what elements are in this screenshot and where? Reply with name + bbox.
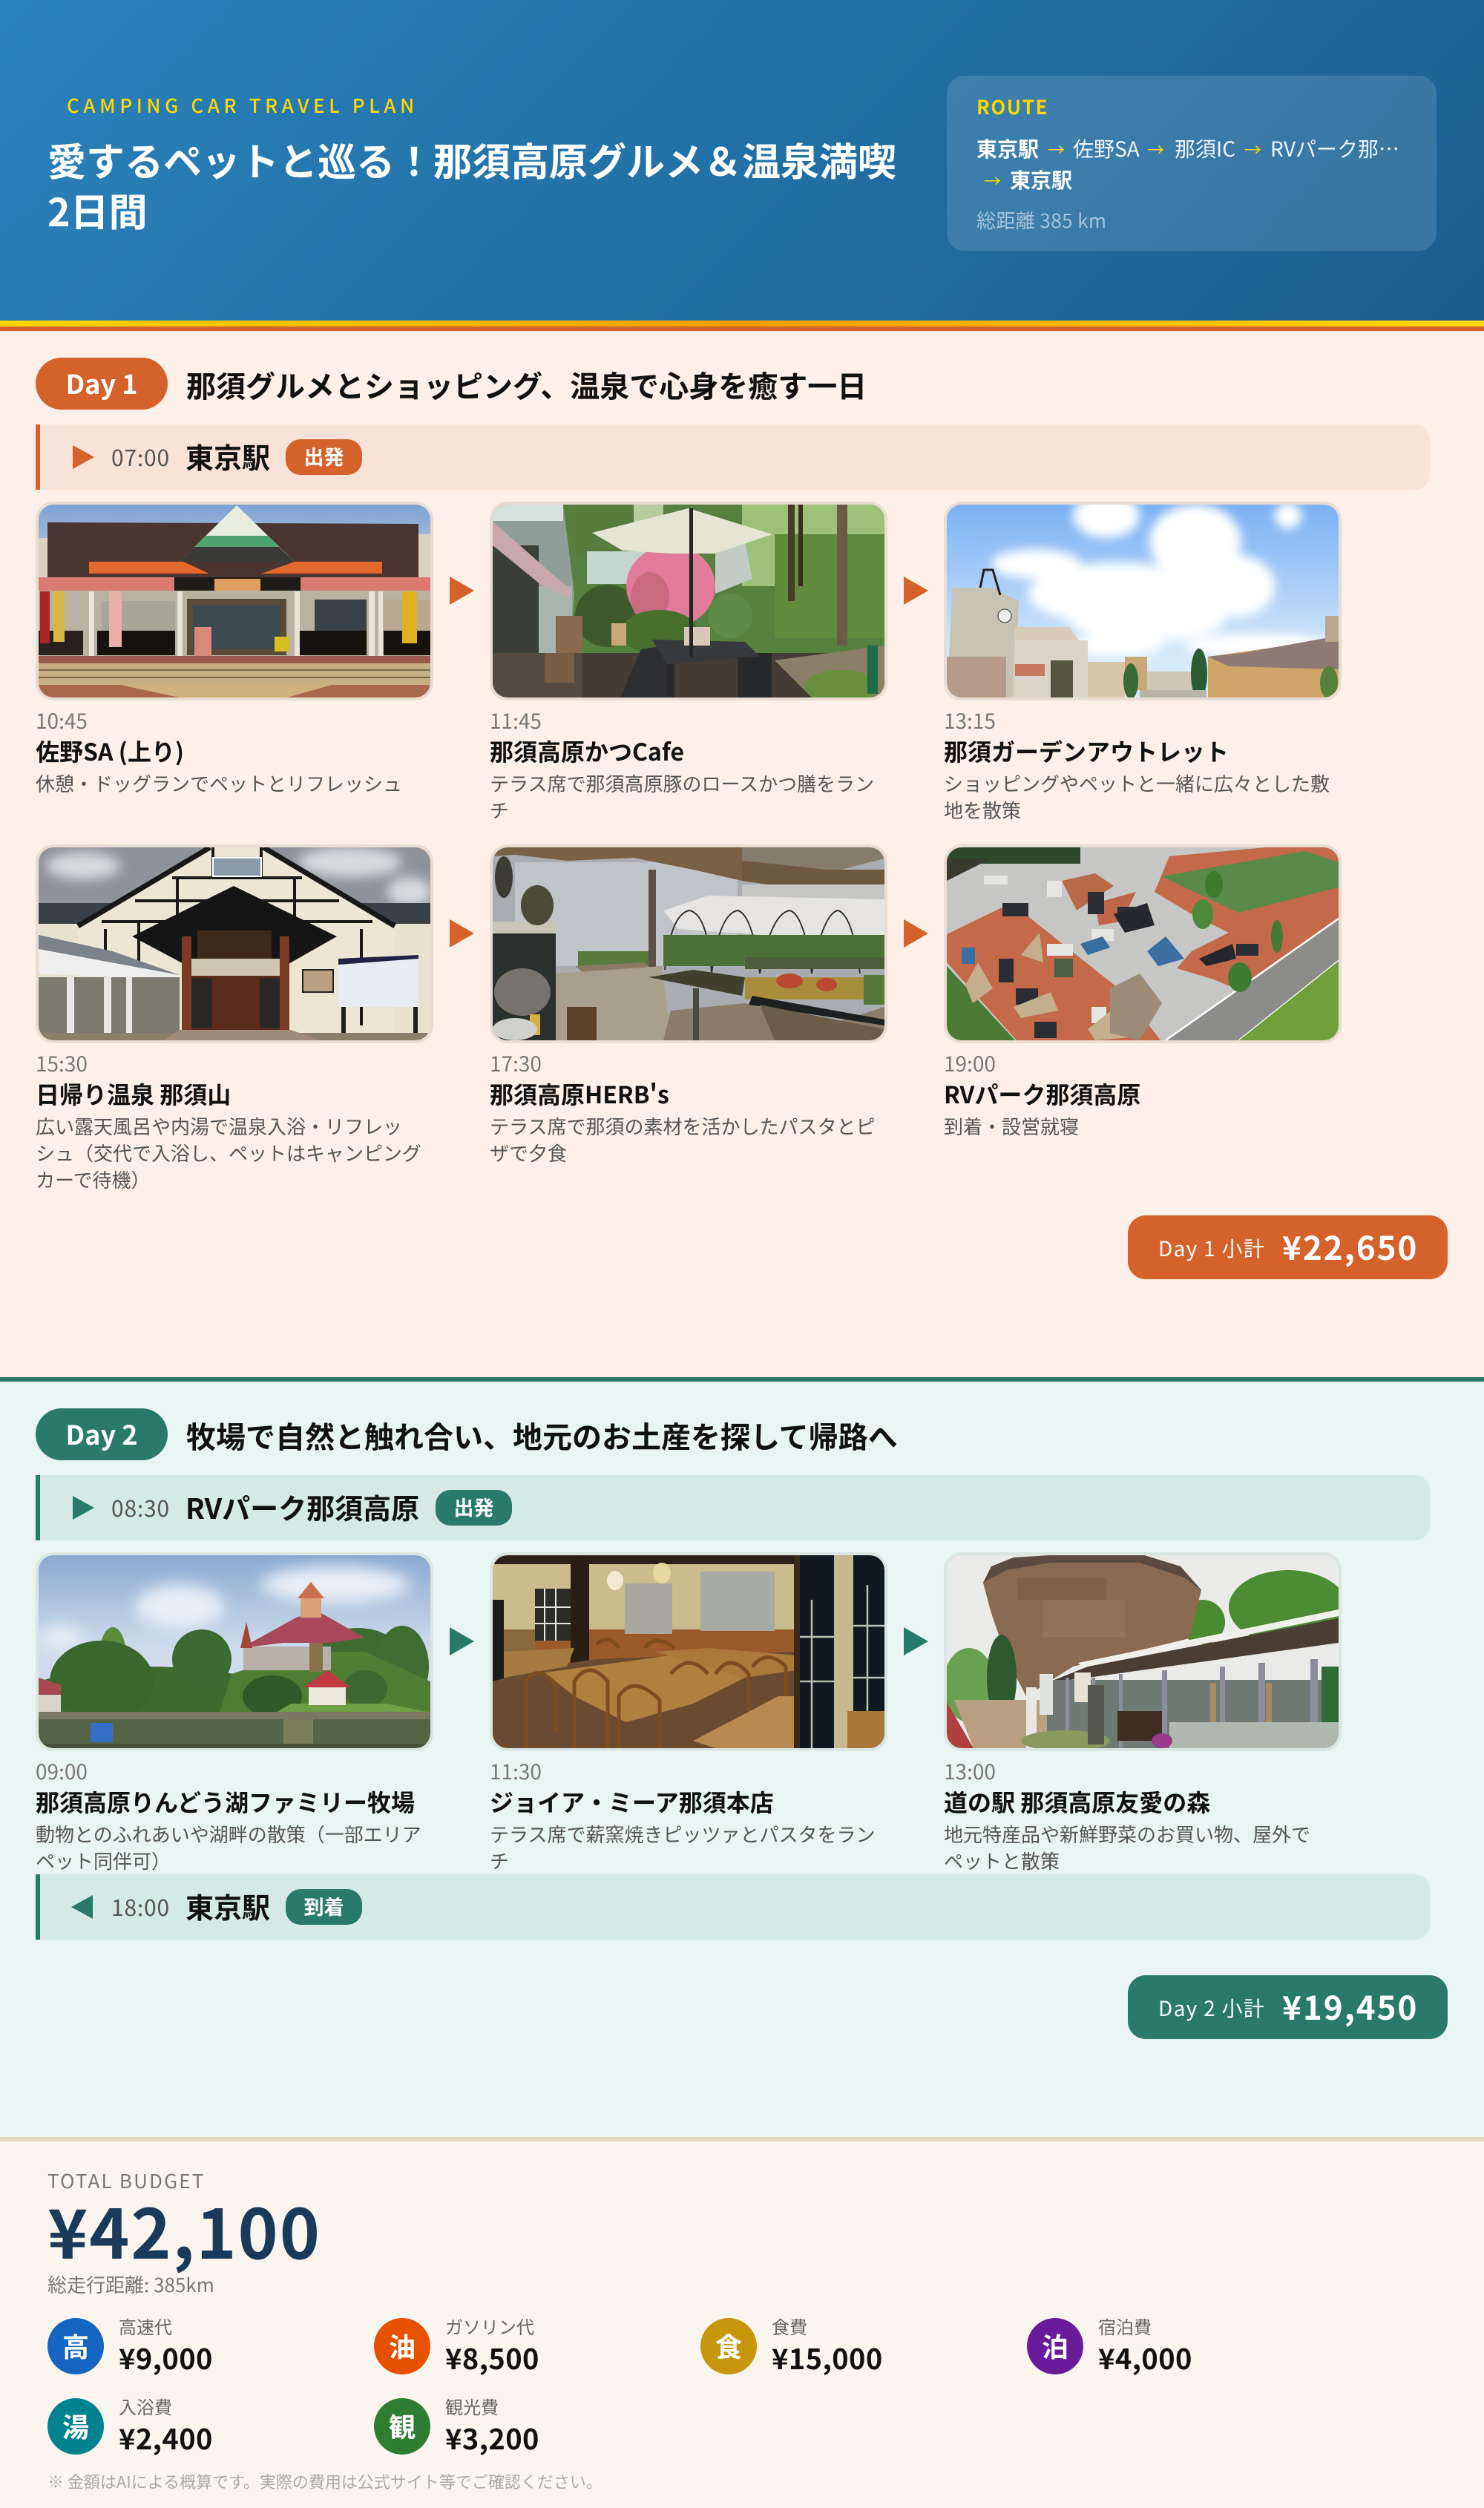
arrow — [450, 577, 474, 605]
day 2 subtotal — [1128, 1975, 1448, 2039]
day 1 heading: 那須グルメとショッピング、温泉で心身を癒す一日 — [186, 363, 867, 406]
description — [944, 1820, 1310, 1874]
photo: lakeside farm — [36, 1552, 433, 1751]
label: 高速代 — [119, 2313, 172, 2339]
departure place: RVパーク那須高原 — [186, 1486, 419, 1527]
stop: Sano SA — [36, 502, 433, 797]
name: 那須高原かつCafe — [490, 734, 684, 768]
stop: garden outlet — [944, 502, 1342, 824]
description: チ — [490, 796, 509, 824]
description — [944, 769, 1330, 824]
route heading: ROUTE — [976, 93, 1048, 120]
day 2 badge: Day 2 — [65, 1414, 138, 1453]
icon: lodging — [1027, 2318, 1083, 2374]
description: 到着・設営就寝 — [944, 1112, 1079, 1140]
stop: katsu cafe — [490, 502, 887, 824]
photo: RV park aerial — [944, 844, 1342, 1043]
icon: highway: 高 — [62, 2326, 89, 2365]
panel: day 2 — [0, 1377, 1484, 2137]
icon: highway — [47, 2318, 104, 2374]
label: 宿泊費 — [1098, 2313, 1152, 2339]
day 1 badge: Day 1 — [65, 364, 138, 402]
title: 愛するペットと巡る！那須高原グルメ＆温泉満喫 — [47, 131, 896, 187]
icon: sightseeing: 観 — [389, 2406, 416, 2445]
description: カーで待機） — [36, 1166, 150, 1193]
route stops: 東京駅 — [976, 134, 1039, 163]
name: 那須高原りんどう湖ファミリー牧場 — [36, 1785, 415, 1819]
icon: sightseeing — [374, 2398, 430, 2455]
description: 地を散策 — [944, 796, 1021, 824]
departure bar — [36, 424, 1430, 490]
route stops: → — [1244, 136, 1261, 161]
stop: RV park — [944, 844, 1342, 1140]
label: 観光費 — [445, 2393, 499, 2419]
stop: michi no eki — [944, 1552, 1342, 1874]
value: ¥15,000 — [772, 2337, 883, 2377]
subtotal label: Day 1 小計 — [1158, 1233, 1265, 1263]
name: 道の駅 那須高原友愛の森 — [944, 1785, 1210, 1819]
value: ¥8,500 — [445, 2337, 539, 2377]
description: シュ（交代で入浴し、ペットはキャンピング — [36, 1139, 421, 1166]
description: 広い露天風呂や内湯で温泉入浴・リフレッ — [36, 1112, 402, 1140]
name: 那須ガーデンアウトレット — [944, 734, 1229, 768]
budget label: TOTAL BUDGET — [47, 2167, 206, 2194]
name: RVパーク那須高原 — [944, 1077, 1140, 1111]
description — [490, 1112, 875, 1166]
stop: herbs — [490, 844, 887, 1166]
stop: family farm — [36, 1552, 433, 1874]
departure tag: 出発 — [304, 441, 344, 470]
description — [490, 1820, 875, 1874]
stop: onsen — [36, 844, 433, 1193]
photo: terrace cafe — [490, 502, 887, 700]
departure tag — [286, 439, 362, 475]
name: ジョイア・ミーア那須本店 — [490, 1785, 774, 1819]
icon: departure triangle — [73, 445, 94, 469]
photo: wooden tower — [944, 1552, 1342, 1751]
cost: food — [700, 2313, 883, 2377]
route stops — [976, 134, 1399, 194]
description: テラス席で那須の素材を活かしたパスタとピ — [490, 1112, 875, 1140]
label: 入浴費 — [119, 2393, 172, 2419]
label: ガソリン代 — [445, 2313, 534, 2339]
photo: Sano service area — [36, 502, 433, 700]
route stops: 東京駅 — [1010, 165, 1072, 194]
value: ¥4,000 — [1098, 2337, 1192, 2377]
icon: food — [700, 2318, 757, 2374]
photo: restaurant interior — [490, 1552, 887, 1751]
title — [47, 131, 896, 237]
photo: greenhouse — [490, 844, 887, 1043]
day 2 badge — [36, 1408, 168, 1460]
header panel — [0, 0, 1484, 326]
cost: sightseeing — [374, 2393, 539, 2458]
description — [490, 769, 874, 824]
description: テラス席で那須高原豚のロースかつ膳をラン — [490, 769, 874, 797]
arrival place: 東京駅 — [186, 1885, 270, 1926]
name: 那須高原HERB's — [490, 1077, 669, 1111]
arrival tag — [286, 1889, 362, 1925]
description: 動物とのふれあいや湖畔の散策（一部エリア — [36, 1820, 421, 1848]
total distance: 総距離 385 km — [976, 206, 1106, 234]
budget total: ¥42,100 — [47, 2180, 321, 2279]
description: チ — [490, 1847, 509, 1874]
time: 19:00 — [944, 1048, 996, 1078]
stop: Gioia Mia — [490, 1552, 887, 1874]
time: 17:30 — [490, 1048, 542, 1078]
route panel — [947, 76, 1437, 251]
icon: departure triangle — [73, 1496, 94, 1520]
description: 休憩・ドッグランでペットとリフレッシュ — [36, 769, 402, 797]
photo: outlet — [944, 502, 1342, 700]
description — [36, 1112, 421, 1193]
value: ¥2,400 — [119, 2417, 213, 2458]
arrow — [450, 1627, 474, 1655]
description: ショッピングやペットと一緒に広々とした敷 — [944, 769, 1330, 797]
icon: fuel — [374, 2318, 430, 2374]
time: 15:30 — [36, 1048, 88, 1078]
description: ペットと散策 — [944, 1847, 1060, 1874]
name: 佐野SA (上り) — [36, 734, 184, 768]
time: 09:00 — [36, 1756, 88, 1786]
description: 地元特産品や新鮮野菜のお買い物、屋外で — [944, 1820, 1310, 1848]
name: 日帰り温泉 那須山 — [36, 1077, 231, 1111]
day 1 subtotal — [1128, 1215, 1448, 1279]
route stops: → — [1147, 136, 1164, 161]
route stops: 佐野SA — [1073, 134, 1140, 163]
cost: fuel — [374, 2313, 539, 2377]
arrival tag: 到着 — [304, 1891, 344, 1920]
icon: fuel: 油 — [389, 2326, 416, 2365]
route stops: RVパーク那… — [1270, 134, 1399, 163]
label: 食費 — [772, 2313, 807, 2339]
description: ペット同伴可） — [36, 1847, 171, 1874]
description: ザで夕食 — [490, 1139, 567, 1166]
icon: lodging: 泊 — [1042, 2326, 1068, 2365]
departure tag: 出発 — [454, 1492, 494, 1521]
route stops: 那須IC — [1175, 134, 1235, 163]
footnote: ※ 金額はAIによる概算です。実際の費用は公式サイト等でご確認ください。 — [47, 2469, 603, 2493]
time: 10:45 — [36, 706, 88, 735]
departure tag — [436, 1490, 512, 1526]
arrow — [904, 919, 928, 948]
departure bar — [36, 1475, 1430, 1540]
cost: highway — [47, 2313, 213, 2377]
accent stripe — [0, 321, 1484, 326]
arrow — [904, 577, 928, 605]
cost: bath — [47, 2393, 213, 2458]
total distance: 総走行距離: 385km — [47, 2271, 214, 2298]
subtotal label: Day 2 小計 — [1158, 1993, 1265, 2023]
time: 13:00 — [944, 1756, 996, 1786]
arrival bar — [36, 1874, 1430, 1940]
value: ¥3,200 — [445, 2417, 539, 2458]
icon: bath — [47, 2398, 104, 2455]
time: 11:45 — [490, 706, 542, 735]
icon: arrival triangle — [71, 1895, 93, 1919]
title: 2日間 — [47, 182, 148, 237]
description — [36, 1820, 421, 1874]
photo: onsen building — [36, 844, 433, 1043]
time: 11:30 — [490, 1756, 542, 1786]
panel: day 1 — [0, 326, 1484, 1377]
route stops: → — [1048, 136, 1065, 161]
panel: total budget — [0, 2137, 1484, 2508]
eyebrow: CAMPING CAR TRAVEL PLAN — [67, 91, 418, 119]
arrow — [450, 919, 474, 948]
description: テラス席で薪窯焼きピッツァとパスタをラン — [490, 1820, 875, 1848]
departure time: 08:30 — [111, 1491, 170, 1523]
arrow — [904, 1627, 928, 1655]
icon: food: 食 — [715, 2326, 742, 2365]
subtotal amount: ¥22,650 — [1282, 1222, 1418, 1270]
arrival time: 18:00 — [111, 1890, 170, 1923]
time: 13:15 — [944, 706, 996, 735]
day 2 heading: 牧場で自然と触れ合い、地元のお土産を探して帰路へ — [186, 1414, 898, 1457]
departure time: 07:00 — [111, 440, 170, 473]
departure place: 東京駅 — [186, 436, 270, 476]
route stops: → — [984, 167, 1001, 192]
icon: bath: 湯 — [62, 2406, 89, 2445]
value: ¥9,000 — [119, 2337, 213, 2377]
cost: lodging — [1027, 2313, 1192, 2377]
day 1 badge — [36, 358, 168, 410]
subtotal amount: ¥19,450 — [1282, 1982, 1418, 2029]
